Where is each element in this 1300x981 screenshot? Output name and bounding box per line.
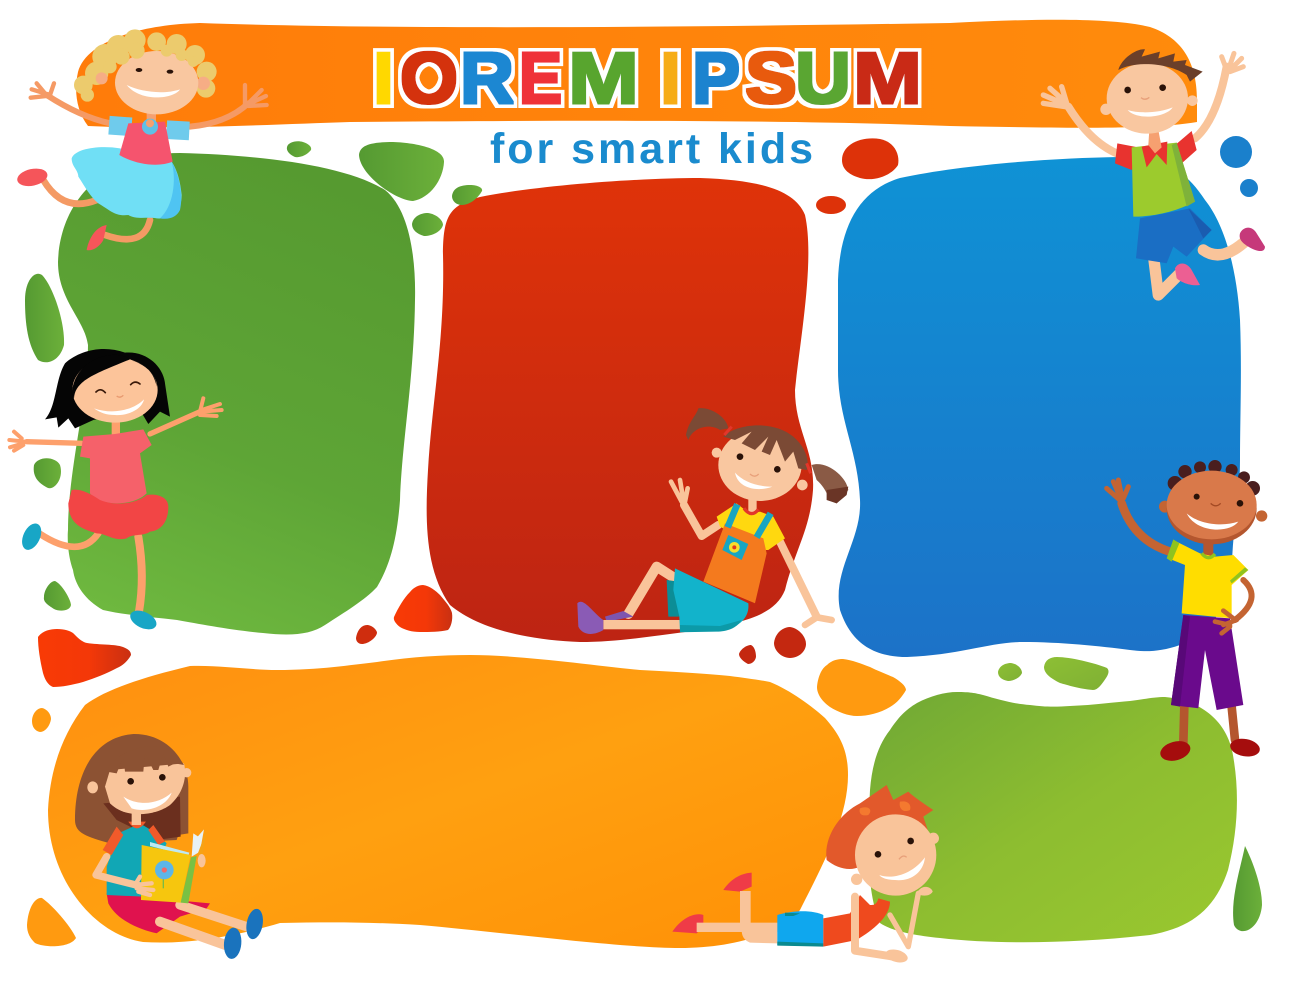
title: IOREM IPSUM xyxy=(373,39,922,119)
panel: red top middle xyxy=(427,178,813,642)
child: red-haired boy lying down xyxy=(672,785,939,965)
panel: blue top right xyxy=(838,157,1241,657)
child: girl with pigtails sitting xyxy=(577,408,848,634)
title: IOREM IPSUM: E xyxy=(519,39,562,119)
blue blobs xyxy=(1220,136,1258,197)
title: IOREM IPSUM: P xyxy=(692,39,740,119)
title banner xyxy=(76,20,1197,128)
title: IOREM IPSUM: S xyxy=(745,39,797,119)
title: IOREM IPSUM: R xyxy=(460,39,514,119)
child: girl reading a book xyxy=(75,734,265,960)
green blobs xyxy=(25,141,1262,931)
child: curly blonde girl jumping xyxy=(16,29,267,250)
title: IOREM IPSUM: I xyxy=(660,39,681,119)
subtitle: for smart kids xyxy=(490,125,813,173)
title: IOREM IPSUM: M xyxy=(853,39,922,119)
panel: orange bottom left xyxy=(48,655,848,948)
orange blobs xyxy=(27,659,906,946)
lime blobs xyxy=(998,657,1109,690)
title: IOREM IPSUM: O xyxy=(400,39,458,119)
panel: green top left xyxy=(58,153,415,634)
child: girl with black hair dancing xyxy=(9,349,222,633)
panel: lime bottom right xyxy=(868,692,1237,942)
child: boy in yellow shirt and purple trousers xyxy=(1107,460,1267,764)
title: IOREM IPSUM: U xyxy=(795,39,851,119)
title: IOREM IPSUM: I xyxy=(373,39,394,119)
child: boy in green shirt jumping xyxy=(1043,49,1265,295)
red blobs xyxy=(38,138,898,687)
title: IOREM IPSUM: M xyxy=(568,39,639,119)
